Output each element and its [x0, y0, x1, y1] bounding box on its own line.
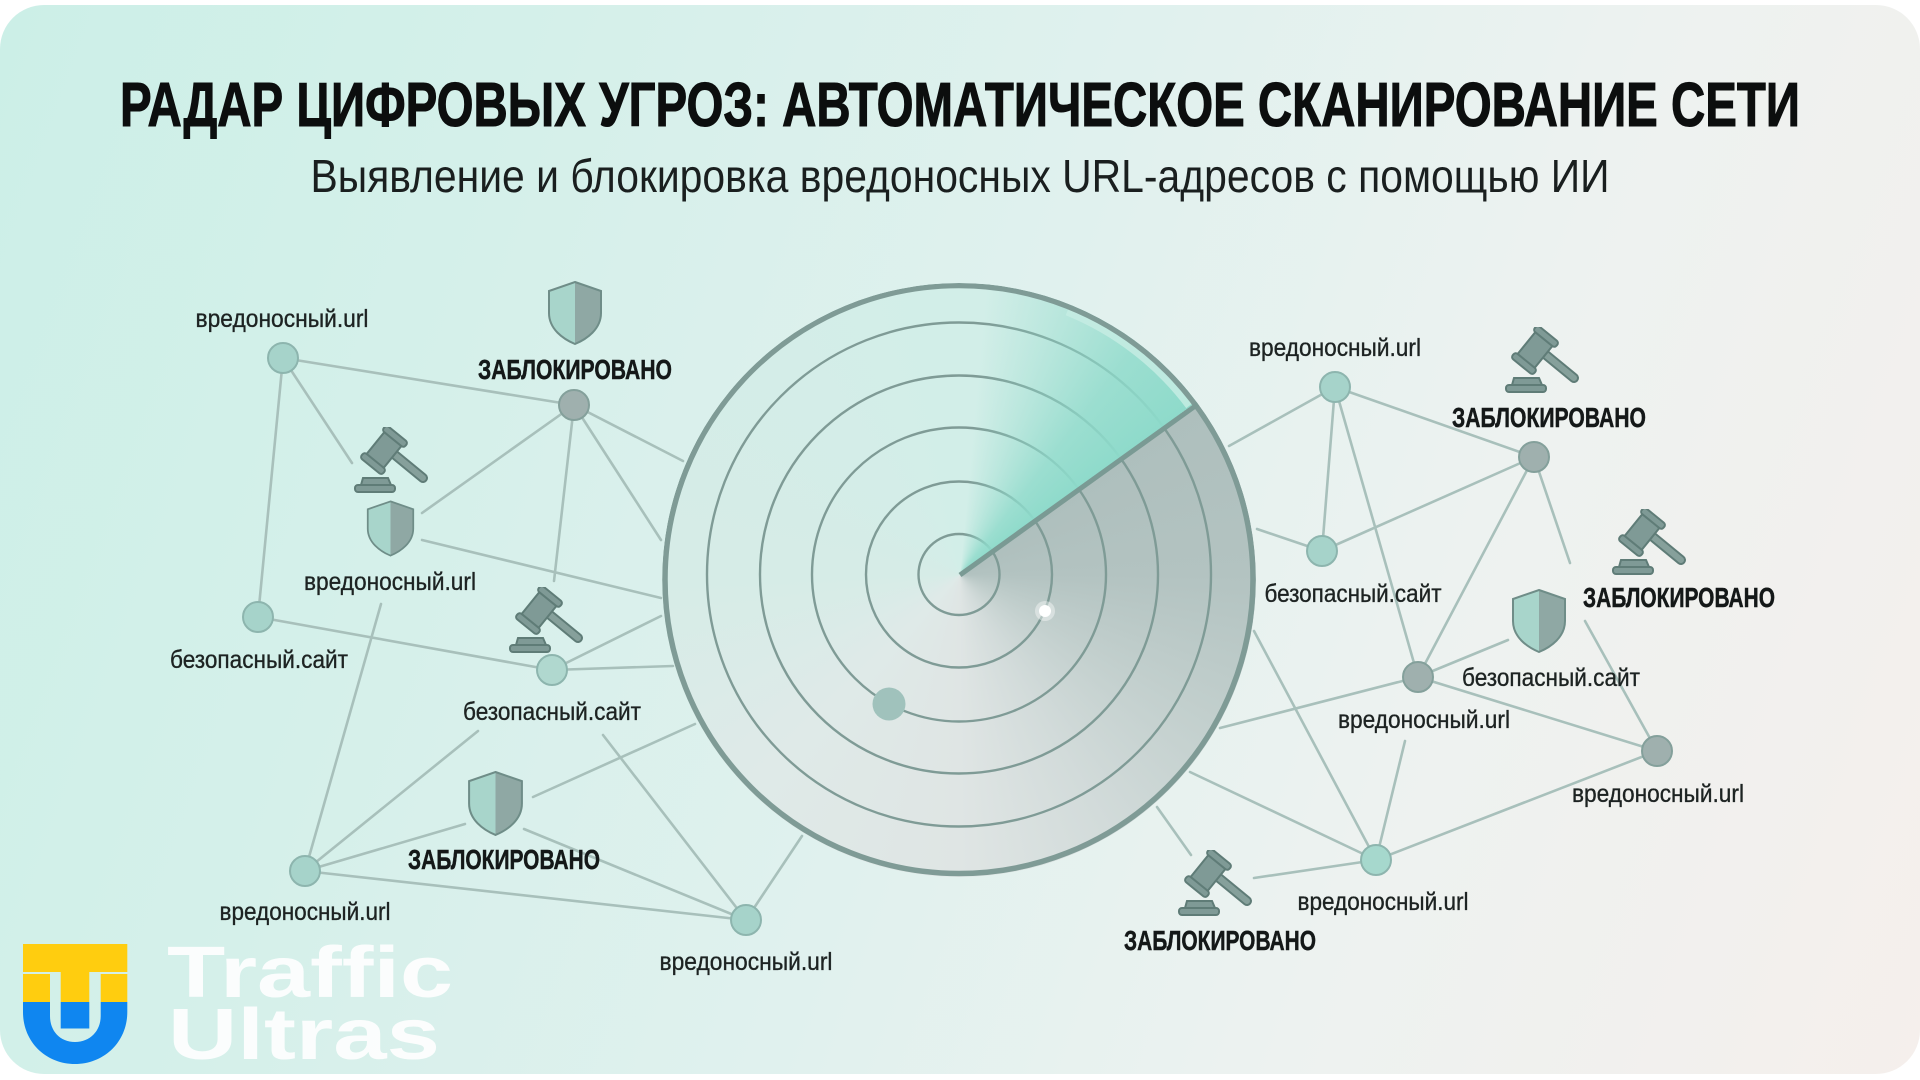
node: вредоносный.url bottom right — [1298, 845, 1468, 916]
node: blocked with shield bottom: ЗАБЛОКИРОВАНО — [408, 844, 600, 875]
node: вредоносный.url far right: вредоносный.url — [1572, 780, 1744, 808]
node: вредоносный.url bottom right: вредоносный.url — [1298, 888, 1468, 916]
node: вредоносный.url bottom center: вредоносный.url — [660, 948, 832, 976]
node: blocked with gavel bottom: ЗАБЛОКИРОВАНО — [1124, 925, 1316, 956]
node: вредоносный.url bottom center — [660, 905, 832, 976]
node: безопасный.сайт upper right — [1264, 536, 1442, 608]
logo — [23, 933, 453, 1075]
node: вредоносный.url bottom left: вредоносный.url — [220, 898, 390, 926]
node: blocked with gavel bottom — [1124, 848, 1316, 956]
node: вредоносный.url bottom left — [220, 856, 390, 926]
icon: gavel left — [355, 425, 423, 492]
node: безопасный.сайт center left: безопасный.сайт — [463, 698, 641, 726]
node: blocked with gavel top right — [1452, 325, 1646, 472]
node: shield with вредоносный.url: вредоносный.url — [304, 568, 476, 596]
node: вредоносный.url center right: вредоносный.url — [1338, 706, 1510, 734]
node: shield with безопасный.сайт — [1462, 590, 1640, 692]
node: вредоносный.url top left: вредоносный.url — [196, 305, 368, 333]
node: вредоносный.url top right — [1249, 334, 1421, 402]
node: blocked with shield bottom — [408, 772, 600, 875]
logo wordmark: Ultras — [168, 995, 440, 1075]
node: shield with безопасный.сайт: безопасный.сайт — [1462, 664, 1640, 692]
node: blocked with gavel top right: ЗАБЛОКИРОВАНО — [1452, 402, 1646, 433]
subtitle: Выявление и блокировка вредоносных URL-адресов с помощью ИИ — [310, 150, 1610, 202]
node: безопасный.сайт left: безопасный.сайт — [170, 646, 348, 674]
node: безопасный.сайт left — [170, 602, 348, 674]
node: вредоносный.url center right — [1338, 662, 1510, 734]
node: вредоносный.url top left — [196, 305, 368, 373]
left network — [170, 282, 832, 976]
node: безопасный.сайт center left — [463, 655, 641, 726]
node: shield with вредоносный.url — [304, 501, 476, 596]
node: вредоносный.url top right: вредоносный.url — [1249, 334, 1421, 362]
node: безопасный.сайт upper right: безопасный.сайт — [1264, 580, 1442, 608]
node: blocked with gavel far right: ЗАБЛОКИРОВАНО — [1583, 582, 1775, 613]
icon: gavel center left — [510, 585, 578, 652]
icon: Traffic Ultras mark — [23, 944, 127, 1064]
node: blocked with shield — [478, 282, 672, 420]
node: вредоносный.url far right — [1572, 736, 1744, 808]
right network — [1124, 325, 1775, 956]
logo wordmark — [167, 933, 453, 1075]
radar — [662, 283, 1256, 877]
node: blocked with shield: ЗАБЛОКИРОВАНО — [478, 354, 672, 385]
node: blocked with gavel far right — [1583, 507, 1775, 613]
logo wordmark: Traffic — [167, 933, 453, 1013]
